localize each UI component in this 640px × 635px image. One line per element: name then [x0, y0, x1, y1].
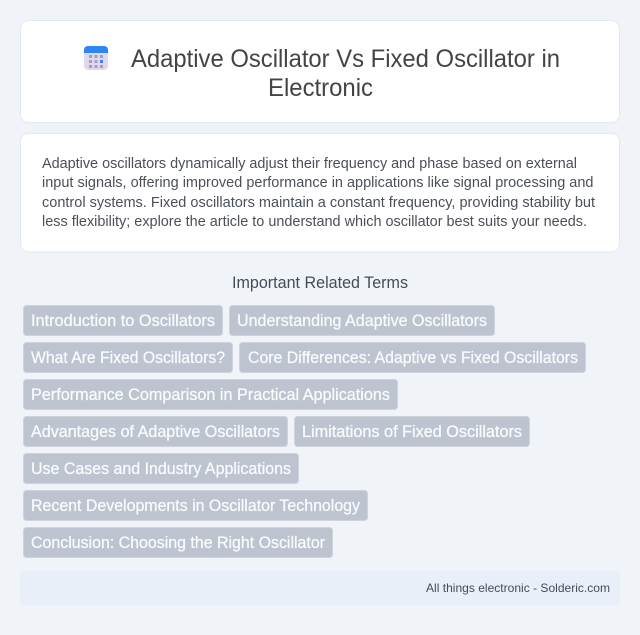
tag: recent developments: [24, 490, 368, 520]
tag: core differences: Core Differences: Adaptive vs Fixed Oscillators: [248, 349, 578, 367]
tag: understanding: [230, 306, 494, 336]
icon: calendar: [84, 46, 108, 70]
tag: conclusion: Conclusion: Choosing the Right Oscillator: [31, 534, 325, 552]
tag: limitations: [294, 416, 530, 446]
tag: recent developments: Recent Developments in Oscillator Technology: [31, 497, 361, 515]
tag: fixed oscillators: [24, 342, 232, 372]
tag list: [24, 306, 586, 558]
text block: description: Adaptive oscillators dynamically adjust their frequency and phase based on external: [42, 155, 577, 172]
tag: performance: Performance Comparison in Practical Applications: [31, 386, 390, 404]
panel: header: [20, 20, 620, 122]
footer: All things electronic - Solderic.com: [426, 581, 610, 595]
title: Electronic: [268, 74, 373, 102]
text block: description: control systems. Fixed oscillators maintain a constant frequency, providing stability but: [42, 194, 596, 211]
heading: related terms: Important Related Terms: [232, 274, 408, 292]
tag: limitations: Limitations of Fixed Oscillators: [302, 423, 522, 441]
tag: use cases: [24, 454, 298, 484]
tag: introduction: [24, 306, 222, 336]
tag: advantages: Advantages of Adaptive Oscillators: [31, 423, 280, 441]
tag: fixed oscillators: What Are Fixed Oscillators?: [31, 349, 225, 367]
tag: performance: [24, 380, 398, 410]
text block: description: input signals, offering improved performance in applications like signal processing and: [42, 174, 594, 191]
title: [131, 45, 560, 102]
footer: [20, 571, 620, 605]
text block: description: less flexibility; explore the article to understand which oscillator best suits your needs.: [42, 213, 587, 230]
title: Adaptive Oscillator Vs Fixed Oscillator in: [131, 45, 560, 73]
tag: conclusion: [24, 528, 332, 558]
text block: description: [42, 155, 596, 230]
panel: description: [20, 134, 620, 252]
tag: core differences: [240, 342, 586, 372]
tag: understanding: Understanding Adaptive Oscillators: [237, 312, 487, 330]
tag: introduction: Introduction to Oscillators: [31, 312, 215, 330]
tag: use cases: Use Cases and Industry Applications: [31, 460, 291, 478]
tag: advantages: [24, 416, 288, 446]
